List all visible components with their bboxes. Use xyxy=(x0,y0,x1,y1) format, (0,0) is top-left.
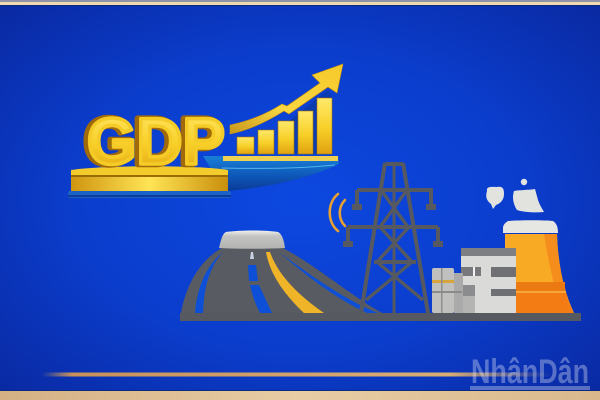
gold pedestal xyxy=(68,166,231,198)
lane dashes xyxy=(248,252,272,313)
bar chart xyxy=(237,98,332,154)
cooling tower xyxy=(503,220,574,313)
road mound xyxy=(181,248,382,313)
transmission tower xyxy=(343,163,443,313)
factory building xyxy=(461,248,516,313)
dome cap xyxy=(219,230,285,249)
bottom gold border xyxy=(0,390,600,400)
infrastructure illustration xyxy=(180,163,581,321)
insulators xyxy=(343,204,443,247)
signal waves xyxy=(330,194,345,231)
steam clouds xyxy=(486,179,544,212)
small side unit xyxy=(432,268,463,313)
left blue gap xyxy=(195,252,223,313)
right blue gap xyxy=(279,252,378,313)
blue swoosh platform xyxy=(203,156,339,191)
highway overpass xyxy=(181,230,382,313)
gold divider line xyxy=(42,372,552,376)
GDP growth emblem xyxy=(68,64,343,198)
GDP title: GDP xyxy=(84,104,222,178)
ground slab xyxy=(180,313,581,321)
top gold border xyxy=(0,0,600,6)
GDP title: GDP xyxy=(87,104,225,178)
yellow lane xyxy=(266,252,324,313)
rising arrow xyxy=(230,64,343,134)
dark blue backing behind bars xyxy=(290,90,332,154)
